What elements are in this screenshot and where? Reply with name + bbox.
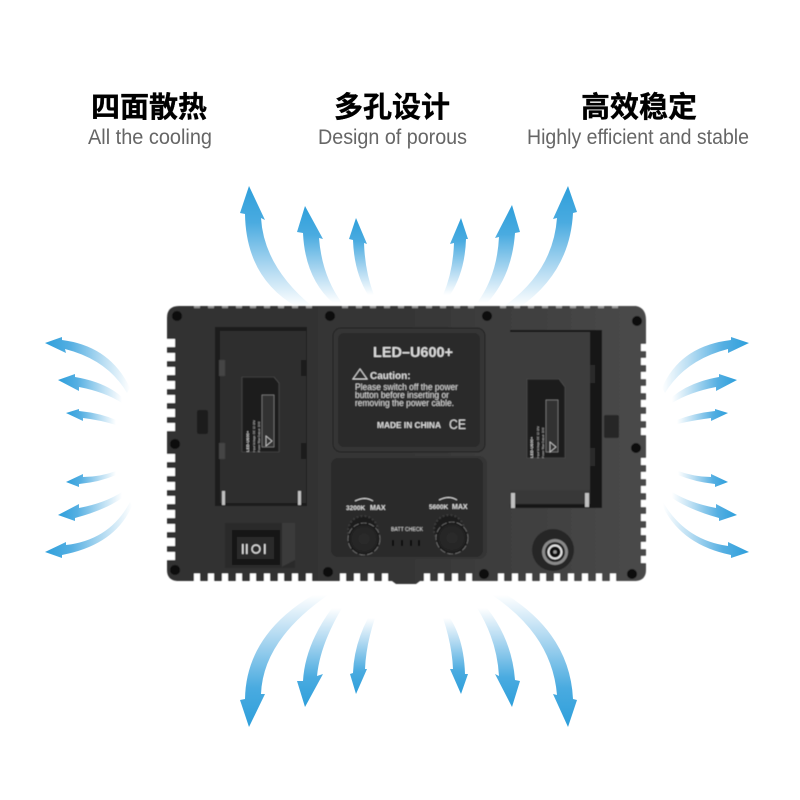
top airflow arrows [240,186,577,307]
heading: high efficiency: Highly efficient and stable [527,126,749,149]
left battery bay [197,327,307,506]
screw holes [170,311,642,579]
DC power jack [532,529,574,571]
caution label plate: Caution: [370,371,411,382]
right battery label [527,379,565,458]
device: LED panel rear [167,306,646,584]
dial: 3200K: MAX [370,505,386,512]
heading: porous design: 多孔设计 [334,91,450,124]
heading: all-round cooling [88,91,212,149]
heading: all-round cooling: All the cooling [88,126,212,149]
right battery label: Power Max Output: 36W [541,427,545,458]
left battery label: Input Voltage: DC 12-18V [252,420,256,452]
dial: 5600K: 5600K [429,504,448,511]
caution label plate: CE [449,417,466,432]
battery check indicators: BATT CHECK [391,527,424,533]
left battery label [242,377,279,452]
battery check indicators [391,527,424,546]
heading: all-round cooling: 四面散热 [91,91,207,124]
cooling fins [171,307,644,578]
right battery bay [510,330,619,508]
left battery label: LED-U600+ [245,430,250,452]
caution label plate: MADE IN CHINA [377,421,441,430]
heading: high efficiency: 高效稳定 [581,91,697,124]
rocker power switch [225,523,295,568]
dial: 5600K [429,498,468,554]
caution label plate: button before inserting or [355,389,449,400]
heading: high efficiency [527,91,749,149]
dial: 5600K: MAX [452,504,468,511]
dial: 3200K: 3200K [346,505,365,512]
left airflow arrows [45,337,132,558]
caution label plate: removing the power cable. [355,397,454,408]
caution label plate [333,328,485,452]
right battery label: LED-U600+ [529,436,534,458]
dial: 3200K [346,498,386,555]
heading: porous design [318,91,467,149]
heading: porous design: Design of porous [318,126,467,149]
caution label plate: LED–U600+ [373,345,453,361]
bottom airflow arrows [240,595,577,727]
panel body [167,306,646,584]
control panel [329,456,487,559]
right battery label: Input Voltage: DC 12-18V [536,426,540,458]
left battery label: Power Max Output: 36W [257,421,261,452]
right airflow arrows [662,337,749,558]
caution label plate: Please switch off the power [355,381,458,392]
